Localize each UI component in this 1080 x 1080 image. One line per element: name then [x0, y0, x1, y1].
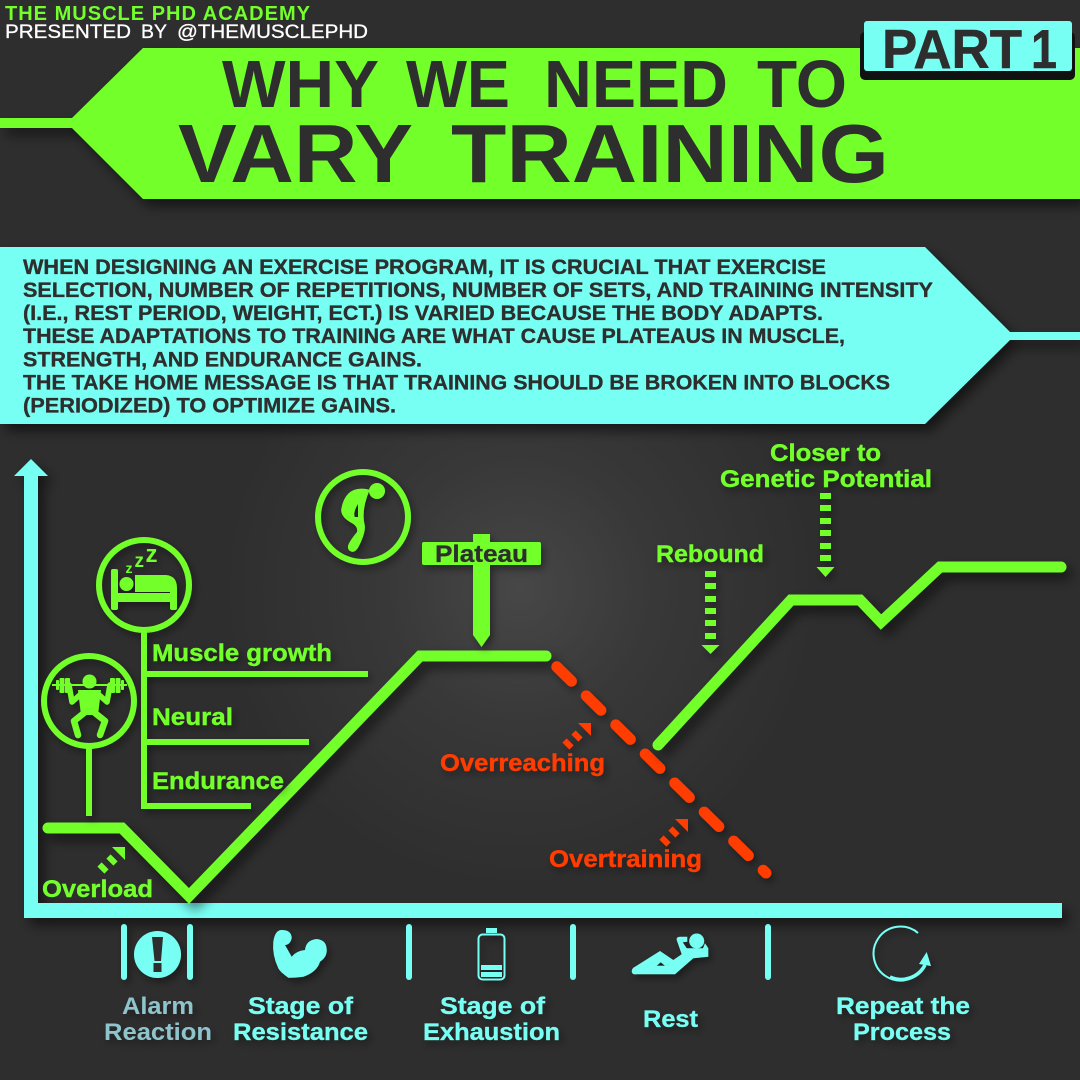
stage: alarm reaction	[104, 924, 212, 1046]
fatigue icon	[318, 472, 408, 562]
title: TO	[757, 47, 847, 122]
title banner	[0, 47, 1080, 200]
stage: repeat the process	[836, 927, 970, 1046]
title: VARY	[178, 107, 413, 200]
stage: exhaustion: Exhaustion	[423, 1019, 560, 1046]
title: WE	[406, 47, 510, 122]
growth curve: rebound phase	[658, 567, 1061, 745]
rebound label and arrow	[656, 541, 764, 654]
branch labels: Endurance	[152, 768, 284, 795]
growth curve: first phase	[48, 656, 546, 896]
rebound label and arrow: Rebound	[656, 541, 764, 568]
title: WHY	[222, 47, 379, 122]
brand header: @THEMUSCLEPHD	[177, 21, 368, 43]
part 1 badge	[860, 18, 1075, 80]
chart axes	[14, 459, 1062, 918]
intro text: (I.E., REST PERIOD, WEIGHT, ECT.) IS VARIED BECAUSE THE BODY ADAPTS.	[23, 301, 823, 325]
intro text: THE TAKE HOME MESSAGE IS THAT TRAINING SHOULD BE BROKEN INTO BLOCKS	[23, 370, 890, 394]
stage: rest	[632, 934, 708, 1033]
overreaching label and arrow: Overreaching	[440, 750, 605, 777]
overtraining label and arrow	[549, 819, 702, 873]
overload label and arrow: Overload	[42, 876, 153, 903]
stage: rest: Rest	[643, 1006, 698, 1033]
sleep icon: z	[134, 551, 144, 572]
overtraining dashed line	[557, 667, 766, 873]
stage: resistance	[233, 930, 368, 1046]
plateau sign	[422, 534, 541, 647]
branch labels: Neural	[152, 704, 233, 731]
part 1 badge: 1	[1031, 18, 1057, 80]
intro text	[23, 255, 933, 418]
sleep icon	[99, 540, 189, 630]
overload label and arrow	[42, 847, 153, 903]
brand header	[5, 3, 368, 43]
intro text: THESE ADAPTATIONS TO TRAINING ARE WHAT CAUSE PLATEAUS IN MUSCLE,	[23, 324, 845, 348]
intro text: (PERIODIZED) TO OPTIMIZE GAINS.	[23, 394, 396, 418]
title: NEED	[544, 47, 728, 122]
closer to genetic potential label and arrow	[720, 440, 932, 577]
title	[178, 47, 889, 200]
closer to genetic potential label and arrow: Genetic Potential	[720, 466, 932, 493]
intro panel	[0, 247, 1080, 424]
closer to genetic potential label and arrow: Closer to	[770, 440, 881, 467]
intro text: STRENGTH, AND ENDURANCE GAINS.	[23, 348, 422, 372]
overreaching label and arrow	[440, 723, 605, 777]
branch labels: Muscle growth	[152, 640, 332, 667]
title: TRAINING	[451, 107, 889, 200]
divider	[765, 924, 771, 980]
brand header: BY	[141, 21, 167, 43]
sleep icon: z	[126, 560, 132, 576]
stage: exhaustion: Stage of	[440, 993, 546, 1020]
plateau sign: Plateau	[435, 541, 528, 568]
stage: resistance: Resistance	[233, 1019, 368, 1046]
divider	[406, 924, 412, 980]
brand header: PRESENTED	[5, 21, 131, 43]
divider	[570, 924, 576, 980]
brand header: THE MUSCLE PHD ACADEMY	[5, 3, 311, 25]
branch labels	[152, 640, 332, 795]
part 1 badge: PART	[882, 18, 1022, 80]
overtraining label and arrow: Overtraining	[549, 846, 702, 873]
stage: repeat the process: Repeat the	[836, 993, 970, 1020]
intro text: SELECTION, NUMBER OF REPETITIONS, NUMBER OF SETS, AND TRAINING INTENSITY	[23, 278, 933, 302]
muscle fibre branches	[144, 630, 368, 806]
stage: alarm reaction: Alarm	[122, 993, 194, 1020]
lifting icon	[44, 656, 134, 816]
stage: alarm reaction: Reaction	[104, 1019, 212, 1046]
stage: resistance: Stage of	[248, 993, 354, 1020]
stage: repeat the process: Process	[853, 1019, 951, 1046]
intro text: WHEN DESIGNING AN EXERCISE PROGRAM, IT IS CRUCIAL THAT EXERCISE	[23, 255, 826, 279]
sleep icon: z	[146, 541, 158, 568]
stage: exhaustion	[423, 928, 560, 1046]
